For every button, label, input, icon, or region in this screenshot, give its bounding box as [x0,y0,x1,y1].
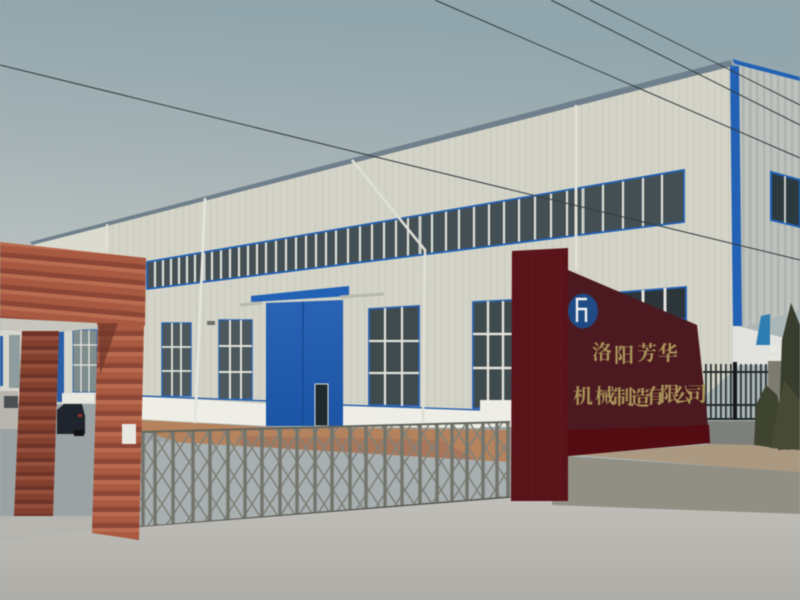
sign text: company name: 洛 [592,341,612,364]
notice paper [122,424,136,444]
roof edge [30,60,733,245]
ground floor window 4 [473,300,514,427]
sign text: company name: 华 [658,342,678,365]
stone post with lamp [766,345,783,421]
blue sliding door [266,300,343,426]
dirt strip behind gate [140,420,510,462]
sign pillar [511,248,568,501]
ground floor window 1 [162,323,191,396]
ground floor window 2 [219,320,252,399]
evergreen shrubs [754,303,800,450]
brick arch lintel [0,242,146,326]
sign text: company name: 制 [613,386,633,409]
ground floor window 3 [369,306,419,406]
sign text: company name: 械 [595,385,615,408]
blue flag [756,314,770,345]
brick base [708,421,760,445]
sign text: company name: 造 [630,387,650,410]
iron fence [703,362,771,420]
sign text: company name: 限 [660,383,680,406]
white base strip [141,396,482,428]
parked cars [0,391,85,436]
warehouse front wall [30,66,740,428]
distant building on the left [0,330,140,404]
side wall blue trim [730,59,800,326]
sky [0,0,800,300]
sign text: company name: 芳 [637,341,657,365]
brick arch left pillar [14,331,59,516]
company logo [568,294,598,328]
downspouts and brace [107,105,576,425]
brick arch right pillar [92,323,144,540]
white side base [733,326,800,365]
sign text: company name: 有 [645,385,665,408]
sign text: company name: 公 [673,385,693,407]
door canopy [240,286,384,305]
power lines [0,0,800,260]
background ground [0,400,520,540]
folding gate [140,420,511,528]
lintel underside [0,318,97,332]
sign wall [568,270,710,456]
sign text: company name: 机 [573,385,593,408]
dirt bed [575,444,800,473]
sign text: company name [573,341,707,410]
window behind sign [612,287,686,320]
warehouse side wall [735,62,800,328]
foreground concrete [0,498,800,600]
concrete retaining wall [552,455,800,514]
side wall window [771,172,800,227]
sign text: company name: 阳 [614,344,634,367]
upper window band [145,168,686,291]
sidewalk patch [0,516,92,540]
camera bracket [207,321,215,325]
sign text: company name: 司 [687,383,707,406]
